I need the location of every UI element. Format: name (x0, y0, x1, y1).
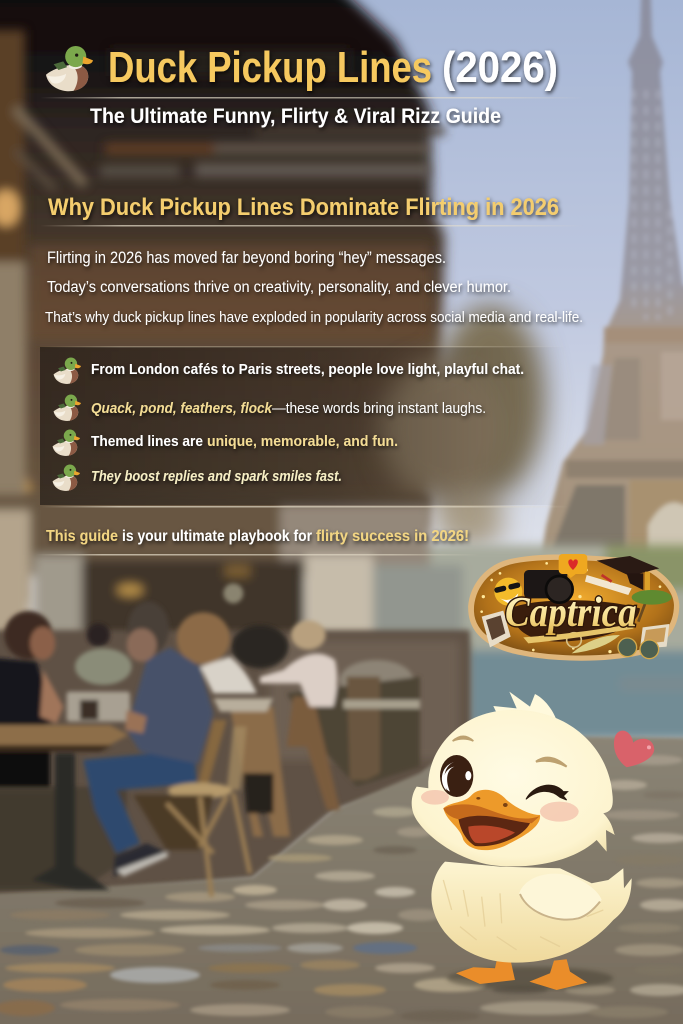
head (412, 710, 615, 866)
closing line: This guide (46, 528, 118, 545)
left eye (440, 755, 473, 797)
title: (2026) (442, 43, 558, 92)
closing line: flirty success in 2026! (316, 528, 469, 545)
text panel background (40, 347, 565, 505)
cafe patrons and chairs (0, 583, 420, 897)
heart (614, 731, 654, 767)
dark building roof (0, 0, 445, 530)
closing line: is your ultimate playbook for (122, 528, 312, 545)
shadow and feet (447, 959, 613, 990)
section heading: Why Duck Pickup Lines Dominate Flirting in 2026 (48, 194, 559, 221)
midground facade and water (0, 495, 683, 755)
bullet 2: —these words bring instant laughs. (272, 400, 486, 417)
bullet 2 (54, 395, 486, 421)
duck character (412, 692, 632, 990)
bullet 4: They boost replies and spark smiles fast. (91, 468, 342, 485)
intro paragraph (45, 248, 583, 326)
intro paragraph: That’s why duck pickup lines have exploded in popularity across social media and real-life. (45, 309, 583, 326)
tree foliage (380, 305, 545, 548)
bullet 3: unique, memorable, and fun. (207, 433, 398, 450)
bullet 3 (53, 430, 398, 456)
logo: Captrica badge (468, 554, 679, 661)
icon: mallard duck title (46, 46, 93, 91)
bullet list (53, 358, 524, 491)
logo icons (480, 554, 672, 659)
wing (519, 874, 602, 920)
cheeks (421, 790, 449, 805)
cobblestone street (0, 735, 683, 1024)
bullet 1: From London cafés to Paris streets, people love light, playful chat. (91, 361, 524, 378)
title block (46, 43, 558, 92)
bullet 2: Quack, pond, feathers, flock (91, 400, 273, 417)
winking eye (526, 785, 568, 800)
bullet 4 (53, 465, 342, 491)
bullet 1 (54, 358, 524, 384)
crest (493, 692, 558, 725)
body (431, 862, 632, 963)
logo wordmark: Captrica (505, 590, 637, 636)
Eiffel tower (536, 0, 683, 590)
bullet 3: Themed lines are (91, 433, 203, 450)
subtitle: The Ultimate Funny, Flirty & Viral Rizz Guide (90, 105, 501, 128)
intro paragraph: Today’s conversations thrive on creativity, personality, and clever humor. (47, 279, 511, 296)
beak (443, 790, 540, 850)
brows (453, 736, 473, 741)
title: Duck Pickup Lines (108, 43, 432, 92)
intro paragraph: Flirting in 2026 has moved far beyond boring “hey” messages. (47, 248, 446, 267)
